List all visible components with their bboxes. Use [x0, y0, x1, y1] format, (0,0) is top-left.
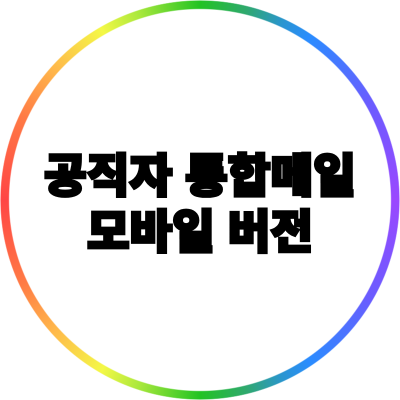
title line 1: 공직자 통합메일 [44, 150, 356, 202]
title line 2: 모바일 버전 [87, 206, 313, 258]
